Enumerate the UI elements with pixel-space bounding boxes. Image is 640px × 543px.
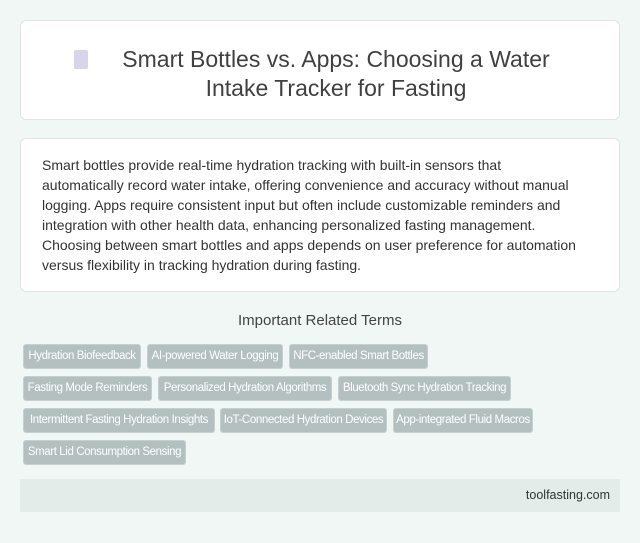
footer [20,479,620,512]
tags: IoT-Connected Hydration Devices [224,414,383,426]
description text: Smart bottles provide real-time hydration tracking with built-in sensors that automatically record water intake, offering convenience and accuracy without manual logging. Apps require consistent input but often include customizable reminders and integration with other health data, enhancing personalized fasting management. Choosing between smart bottles and apps depends on user preference for automation versus flexibility in tracking hydration during fasting. [42,157,576,273]
tags: Personalized Hydration Algorithms [164,382,326,394]
header card [20,20,620,120]
icon: document [74,50,88,69]
footer: toolfasting.com [526,488,610,502]
tags: Bluetooth Sync Hydration Tracking [343,382,506,394]
heading: related terms: Important Related Terms [238,312,402,329]
description text [20,138,620,292]
title: Smart Bottles vs. Apps: Choosing a Water Intake Tracker for Fasting [122,46,550,101]
tags: Smart Lid Consumption Sensing [28,446,181,458]
tags: NFC-enabled Smart Bottles [293,350,424,362]
tags: Hydration Biofeedback [28,350,136,362]
tags: AI-powered Water Logging [152,350,278,362]
tags: Fasting Mode Reminders [28,382,147,394]
tags: App-integrated Fluid Macros [396,414,530,426]
tags: Intermittent Fasting Hydration Insights [30,414,208,426]
